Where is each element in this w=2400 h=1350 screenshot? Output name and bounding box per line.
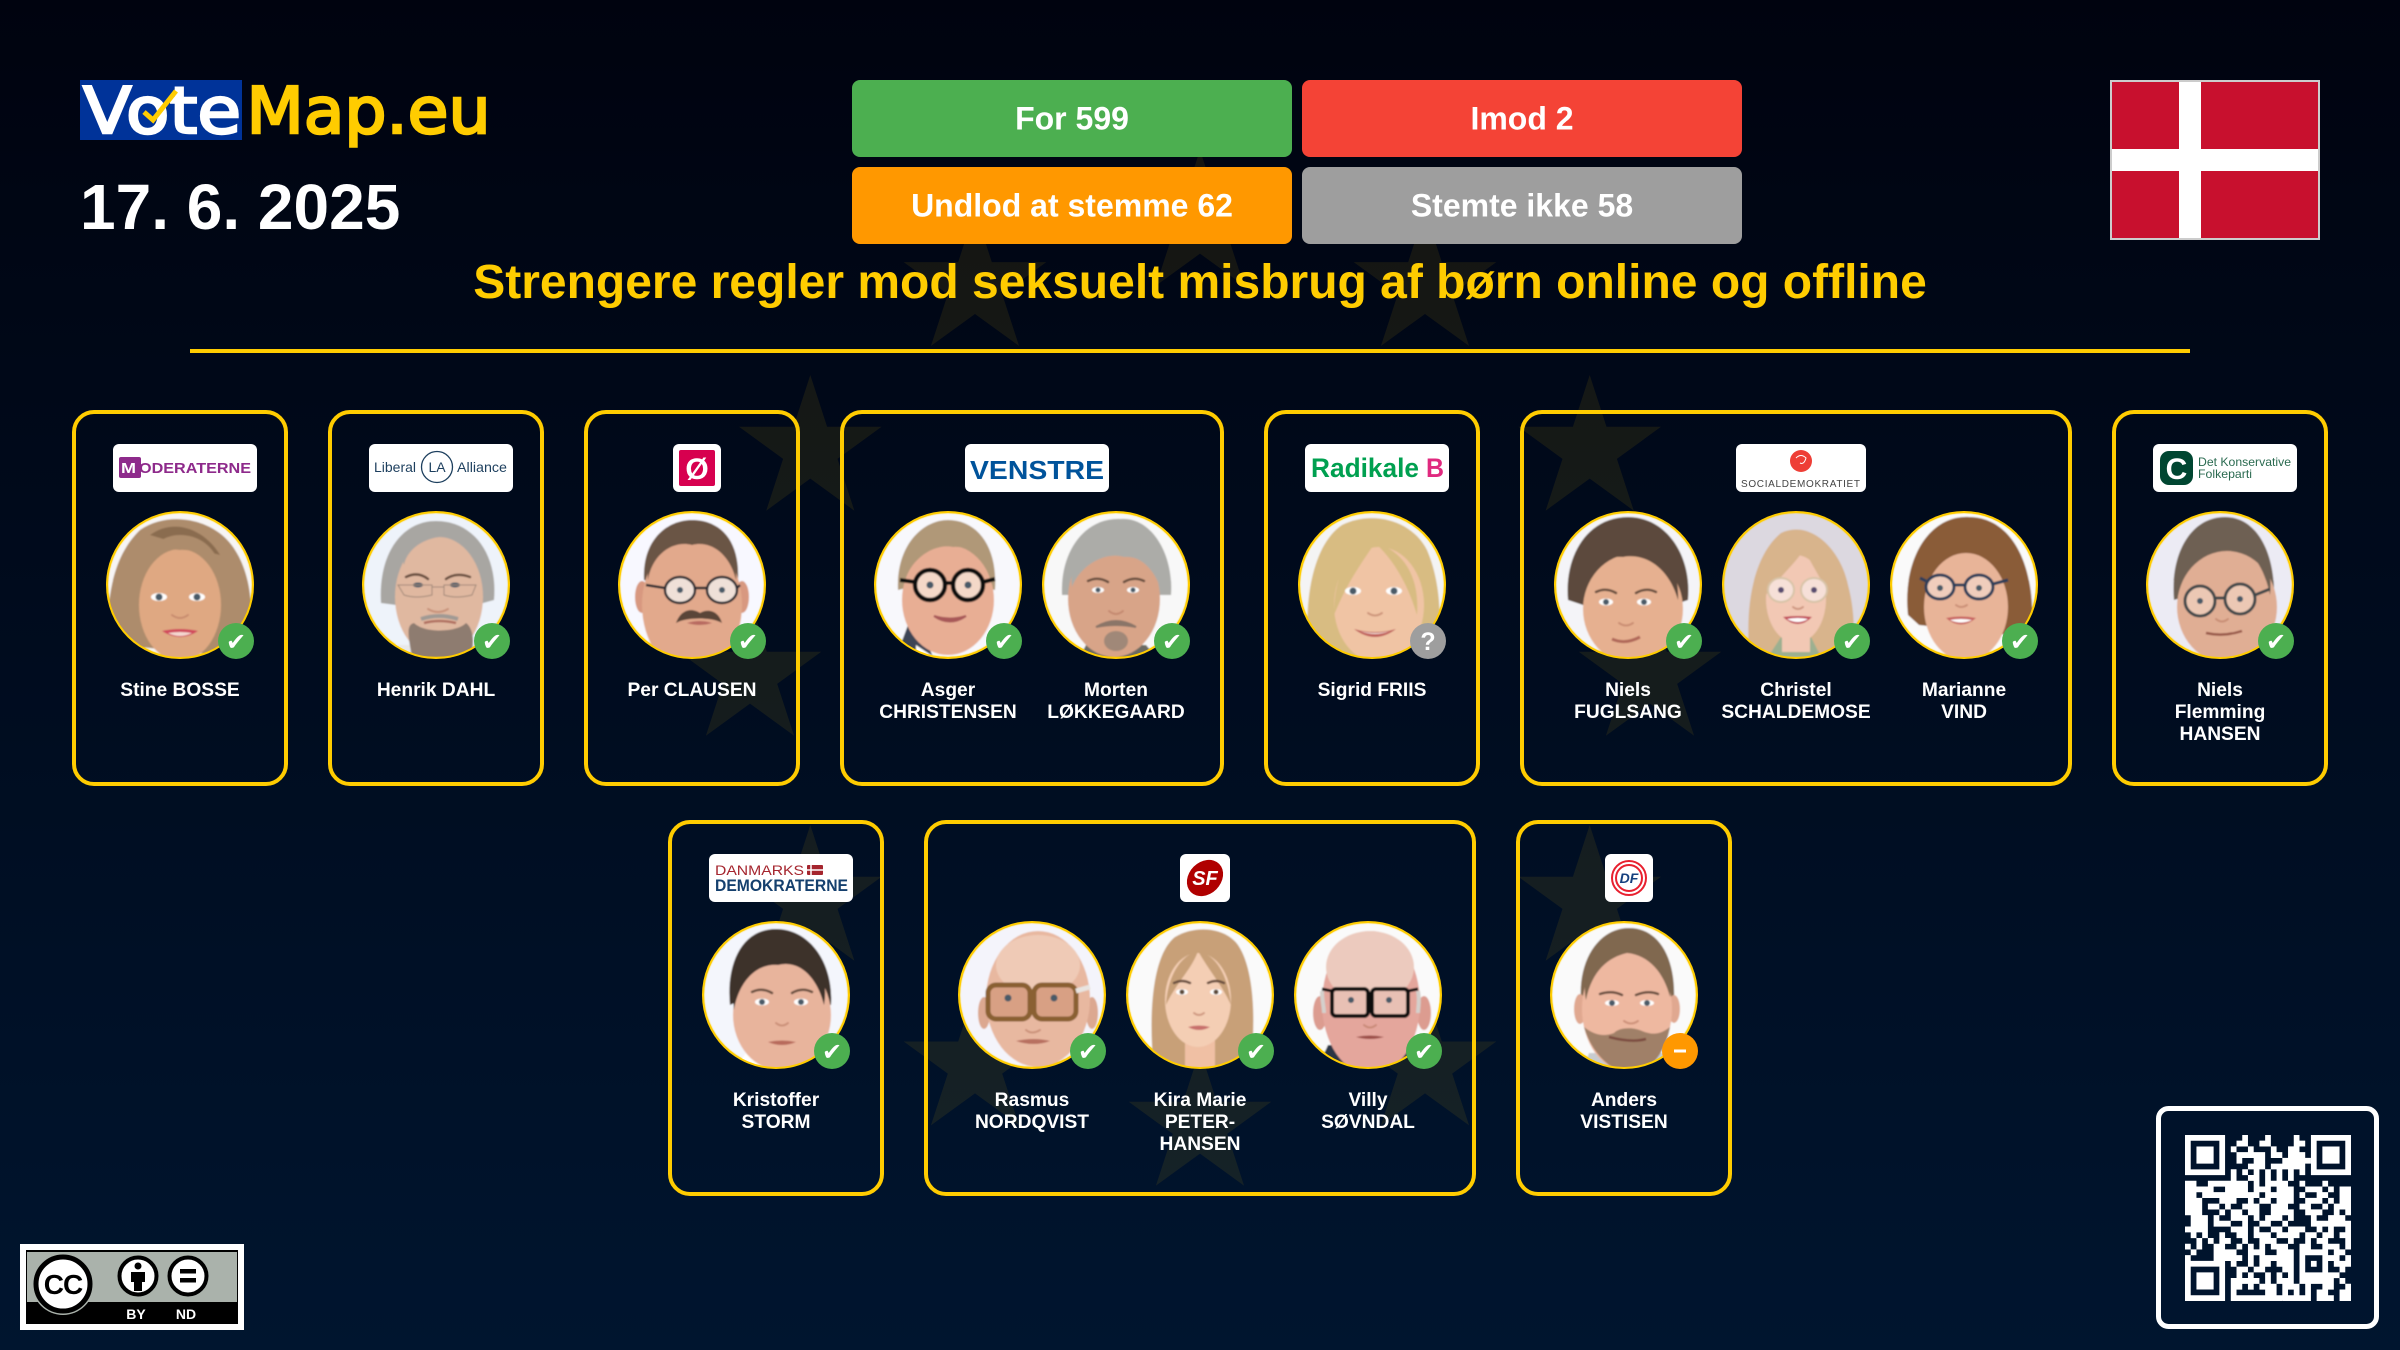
name: Stine BOSSE	[120, 680, 240, 701]
name	[879, 680, 1017, 723]
party logo: SF: SF	[1192, 868, 1219, 890]
vote badge: did not vote	[1410, 623, 1446, 659]
member: Niels Flemming Hansen	[2146, 511, 2294, 745]
party logo: Danmarksdemokraterne: DANMARKS	[715, 862, 804, 878]
licence badge: CC BY-ND: BY	[126, 1306, 146, 1322]
vote badge: for: ✔	[226, 628, 246, 656]
licence badge: CC BY-ND: ND	[176, 1306, 196, 1322]
party logo: Radikale B: B	[1426, 453, 1444, 483]
date: 17. 6. 2025	[80, 171, 400, 243]
panel: Det Konservative Folkeparti	[2114, 412, 2326, 784]
logo: VoteMap.eu: Vote	[83, 75, 241, 149]
vote tally: For	[852, 80, 1292, 157]
vote badge: for	[1834, 623, 1870, 659]
flag: Denmark	[2111, 81, 2319, 239]
vote tally: Stemte ikke	[1302, 167, 1742, 244]
member: Morten Løkkegaard	[1042, 511, 1190, 723]
member: Sigrid Friis	[1298, 511, 1446, 701]
portrait: Villy Søvndal	[1294, 921, 1442, 1075]
name	[1580, 1090, 1668, 1133]
portrait: Stine Bosse	[106, 511, 254, 661]
party logo: DF	[1605, 854, 1653, 902]
vote badge: for	[1070, 1033, 1106, 1069]
party logo: Det Konservative Folkeparti: Folkeparti	[2198, 467, 2252, 481]
panel: Enhedslisten	[586, 412, 798, 784]
name: VIND	[1941, 702, 1987, 723]
party logo: Venstre: VENSTRE	[970, 455, 1104, 485]
vote badge: for: ✔	[1162, 628, 1182, 656]
member: Per Clausen	[618, 511, 766, 701]
panel: Liberal Alliance	[330, 412, 542, 784]
party logo: Radikale B	[1305, 444, 1449, 492]
portrait: Henrik Dahl	[362, 511, 510, 659]
vote badge: for: ✔	[2266, 628, 2286, 656]
vote tally: For: For 599	[1015, 100, 1129, 136]
vote badge: for: ✔	[1674, 628, 1694, 656]
party logo: Radikale B: Radikale	[1311, 453, 1419, 483]
panel: Socialdemokratiet	[1522, 412, 2070, 784]
member: Kristoffer Storm	[702, 921, 850, 1133]
name	[1047, 680, 1185, 723]
logo: VoteMap.eu	[80, 75, 490, 149]
EU stars circle	[679, 150, 1721, 1186]
member: Rasmus Nordqvist	[958, 921, 1106, 1133]
name: SCHALDEMOSE	[1721, 702, 1871, 723]
portrait: Niels Flemming Hansen	[2146, 511, 2294, 663]
vote tally: Stemte ikke: Stemte ikke 58	[1411, 188, 1633, 224]
vote badge: for	[1238, 1033, 1274, 1069]
party logo: Moderaterne: ODERATERNE	[139, 460, 251, 477]
portrait: Morten Løkkegaard	[1042, 511, 1190, 659]
vote badge: for	[730, 623, 766, 659]
member: Kira Marie Peter-Hansen	[1126, 921, 1274, 1155]
party logo: SF	[1180, 853, 1230, 903]
member: Asger Christensen	[874, 511, 1022, 723]
party logo: DF: DF	[1620, 870, 1639, 886]
name: Henrik DAHL	[377, 680, 495, 701]
panel: Moderaterne	[74, 412, 286, 784]
portrait: Rasmus Nordqvist	[958, 921, 1106, 1069]
vote badge: for: ✔	[1078, 1038, 1098, 1066]
portrait: Anders Vistisen	[1550, 921, 1698, 1073]
name: PETER-	[1165, 1112, 1235, 1133]
name	[1922, 680, 2006, 723]
party logo: Det Konservative Folkeparti: Det Konservative	[2198, 455, 2291, 469]
party logo: Liberal Alliance: Alliance	[457, 459, 507, 475]
title: Strengere regler mod seksuelt misbrug af børn online og offline	[473, 256, 1927, 309]
name: Anders	[1591, 1090, 1657, 1111]
name: LØKKEGAARD	[1047, 702, 1185, 723]
name: Villy	[1348, 1090, 1388, 1111]
party logo: Danmarksdemokraterne	[709, 854, 853, 902]
name: Kristoffer	[733, 1090, 820, 1111]
member: Anders Vistisen	[1550, 921, 1698, 1133]
name: Sigrid FRIIS	[1318, 680, 1427, 701]
name: VISTISEN	[1580, 1112, 1668, 1133]
party logo: Det Konservative Folkeparti: C	[2166, 453, 2187, 486]
name: CHRISTENSEN	[879, 702, 1017, 723]
name	[1721, 680, 1871, 723]
vote badge: for: ✔	[1414, 1038, 1434, 1066]
name: STORM	[742, 1112, 810, 1133]
name: Flemming	[2175, 702, 2265, 723]
licence badge: CC BY-ND	[20, 1244, 244, 1330]
portrait: Niels Fuglsang	[1554, 511, 1702, 664]
panel: Dansk Folkeparti	[1518, 822, 1730, 1194]
logo: VoteMap.eu: Map.eu	[246, 75, 490, 149]
panel: Danmarksdemokraterne	[670, 822, 882, 1194]
vote badge: for	[814, 1033, 850, 1069]
portrait: Kira Marie Peter-Hansen	[1126, 921, 1274, 1075]
vote badge: for: ✔	[738, 628, 758, 656]
party logo: Liberal Alliance: LA	[428, 459, 446, 475]
member: Henrik Dahl	[362, 511, 510, 701]
vote badge: for	[1406, 1033, 1442, 1069]
portrait: Marianne Vind	[1890, 511, 2038, 661]
portrait: Asger Christensen	[874, 511, 1022, 659]
party logo: Socialdemokratiet: SOCIALDEMOKRATIET	[1741, 479, 1860, 490]
name: SØVNDAL	[1321, 1112, 1415, 1133]
party logo: Moderaterne	[113, 444, 257, 492]
panel: Radikale Venstre	[1266, 412, 1478, 784]
vote badge: for: ✔	[482, 628, 502, 656]
party logo: Moderaterne: M	[121, 460, 136, 477]
name: Kira Marie	[1154, 1090, 1247, 1111]
party logo: Det Konservative Folkeparti	[2153, 444, 2297, 492]
vote tally: Undlod at stemme	[852, 167, 1292, 244]
portrait: Per Clausen	[618, 511, 766, 673]
name: Niels	[2197, 680, 2243, 701]
vote badge: for	[2258, 623, 2294, 659]
vote badge: did not vote: ?	[1420, 628, 1436, 656]
portrait: Kristoffer Storm	[702, 921, 850, 1071]
member: Niels Fuglsang	[1554, 511, 1702, 723]
name	[1574, 680, 1682, 723]
vote badge: for	[218, 623, 254, 659]
vote badge: for	[474, 623, 510, 659]
vote badge: for	[2002, 623, 2038, 659]
portrait: Christel Schaldemose	[1722, 511, 1870, 660]
member: Villy Søvndal	[1294, 921, 1442, 1133]
party logo: Socialdemokratiet	[1736, 444, 1866, 492]
vote badge: for: ✔	[822, 1038, 842, 1066]
vote badge: for: ✔	[2010, 628, 2030, 656]
name	[975, 1090, 1089, 1133]
member: Stine Bosse	[106, 511, 254, 701]
name	[733, 1090, 820, 1133]
member: Christel Schaldemose	[1721, 511, 1871, 723]
name: NORDQVIST	[975, 1112, 1089, 1133]
name: FUGLSANG	[1574, 702, 1682, 723]
name: Marianne	[1922, 680, 2006, 701]
vote badge: for: ✔	[994, 628, 1014, 656]
member: Marianne Vind	[1890, 511, 2038, 723]
vote tally: Imod: Imod 2	[1470, 100, 1574, 136]
name: HANSEN	[1159, 1134, 1241, 1155]
panel: Venstre	[842, 412, 1222, 784]
name: Niels	[1605, 680, 1651, 701]
vote tally: Imod	[1302, 80, 1742, 157]
name: HANSEN	[2179, 724, 2261, 745]
party logo: Enhedslisten Ø	[673, 444, 721, 492]
portrait: Sigrid Friis	[1298, 511, 1446, 663]
vote badge: for	[1666, 623, 1702, 659]
name	[1321, 1090, 1415, 1133]
licence badge: CC BY-ND: CC	[44, 1269, 83, 1300]
panel: SF	[926, 822, 1474, 1194]
name: Rasmus	[995, 1090, 1069, 1111]
name	[2175, 680, 2265, 745]
vote badge: for: ✔	[1246, 1038, 1266, 1066]
vote badge: abstain	[1662, 1033, 1698, 1069]
QR code	[2158, 1108, 2376, 1326]
vote tally: Undlod at stemme: Undlod at stemme 62	[911, 188, 1233, 224]
party logo: Venstre	[965, 444, 1109, 492]
party logo: Danmarksdemokraterne: DEMOKRATERNE	[715, 877, 848, 895]
name: Morten	[1084, 680, 1148, 701]
name: Asger	[921, 680, 976, 701]
name: Christel	[1760, 680, 1832, 701]
vote badge: for	[1154, 623, 1190, 659]
title divider	[190, 349, 2190, 353]
party logo: Enhedslisten Ø: Ø	[685, 453, 709, 486]
party logo: Liberal Alliance	[369, 444, 513, 492]
vote badge: for	[986, 623, 1022, 659]
name: Per CLAUSEN	[627, 680, 757, 701]
vote badge: for: ✔	[1842, 628, 1862, 656]
party logo: Liberal Alliance: Liberal	[374, 459, 416, 475]
name	[1154, 1090, 1247, 1155]
